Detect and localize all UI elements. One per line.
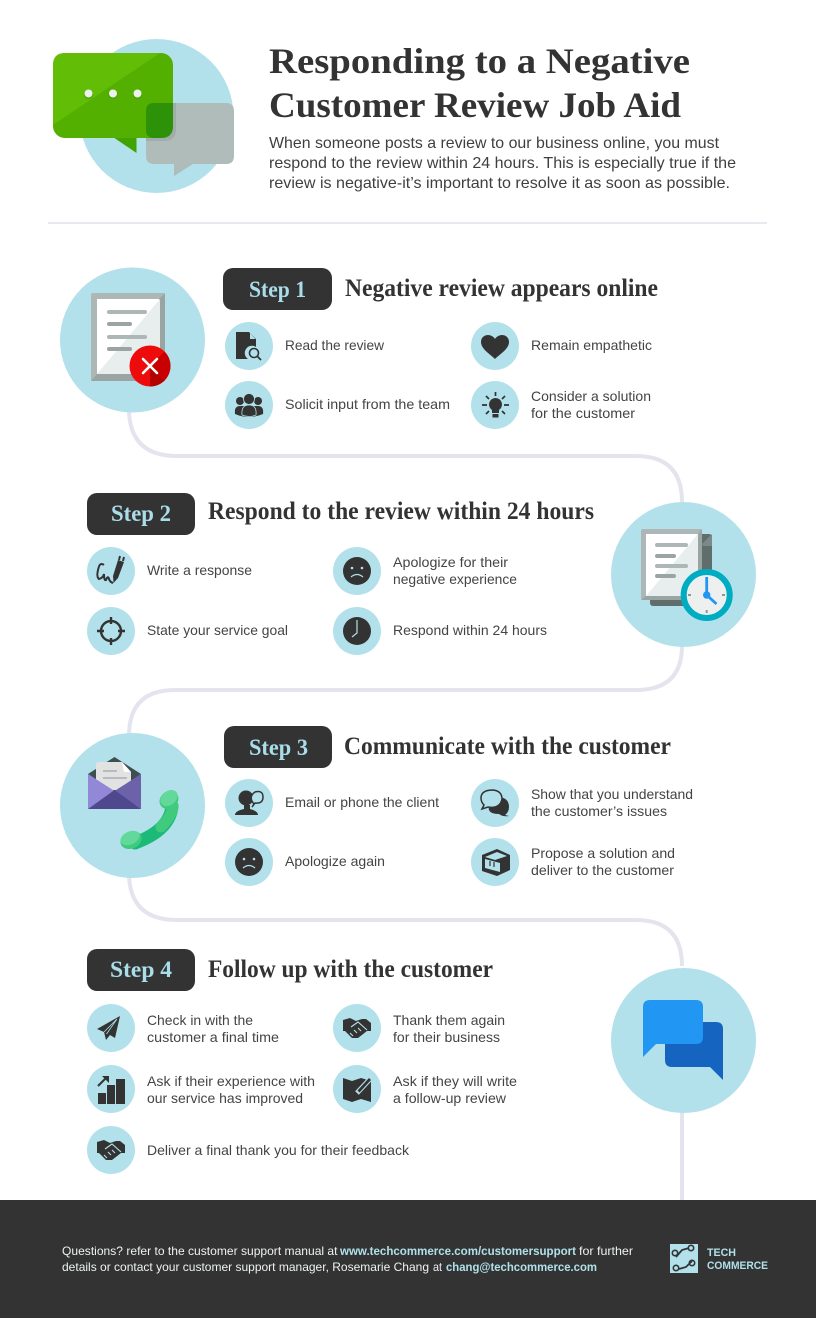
item: consider a solution: Consider a solution	[531, 388, 651, 404]
item: apologize: Apologize for their	[393, 554, 508, 570]
footer text: at	[433, 1260, 443, 1274]
item: check in: customer a final time	[147, 1029, 279, 1045]
step 4 badge: Step 4	[110, 957, 173, 982]
item: propose a solution: Propose a solution and	[531, 845, 675, 861]
step 1 badge	[223, 268, 332, 310]
item: check in	[87, 1004, 279, 1052]
intro paragraph	[269, 135, 736, 192]
item: email or phone	[225, 779, 439, 827]
intro paragraph: review is negative-it’s important to resolve it as soon as possible.	[269, 175, 730, 192]
item: consider a solution: for the customer	[531, 405, 635, 421]
item: show understanding	[471, 779, 693, 827]
icon: header chat bubbles	[53, 39, 234, 193]
footer text	[62, 1244, 633, 1274]
panel: footer	[0, 1200, 816, 1318]
item: remain empathetic	[471, 322, 652, 370]
item: write a response: Write a response	[147, 562, 252, 578]
footer text: www.techcommerce.com/customersupport	[339, 1244, 576, 1258]
panel: step 3	[60, 726, 693, 886]
item: show understanding: Show that you understand	[531, 786, 693, 802]
item: ask about experience	[87, 1065, 315, 1113]
title: Responding to a Negative	[269, 41, 690, 81]
panel: step 2	[87, 493, 756, 655]
footer text: for further	[579, 1244, 633, 1258]
item: remain empathetic: Remain empathetic	[531, 337, 652, 353]
item: follow-up review	[333, 1065, 517, 1113]
step 1 heading: Negative review appears online	[345, 275, 658, 302]
item: show understanding: the customer’s issues	[531, 803, 667, 819]
item: state your service goal: State your service goal	[147, 622, 288, 638]
step 4 heading: Follow up with the customer	[208, 956, 493, 983]
panel: step 4	[87, 949, 756, 1174]
footer text: chang@techcommerce.com	[446, 1260, 597, 1274]
intro paragraph: respond to the review within 24 hours. This is especially true if the	[269, 155, 736, 172]
item: consider a solution	[471, 381, 651, 429]
item: final thank you	[87, 1126, 410, 1174]
logo: tech commerce: COMMERCE	[707, 1260, 768, 1272]
panel: step 1	[60, 268, 658, 429]
item: thank them again: Thank them again	[393, 1012, 505, 1028]
item: solicit input: Solicit input from the team	[285, 396, 450, 412]
item: thank them again	[333, 1004, 505, 1052]
item: state your service goal	[87, 607, 288, 655]
item: final thank you: Deliver a final thank you for their feedback	[147, 1142, 410, 1158]
step 2 badge	[87, 493, 195, 535]
icon: document with clock	[611, 502, 756, 647]
title	[269, 41, 690, 125]
title: Customer Review Job Aid	[269, 85, 681, 125]
intro paragraph: When someone posts a review to our business online, you must	[269, 135, 720, 152]
step 2 badge: Step 2	[111, 501, 171, 526]
item: check in: Check in with the	[147, 1012, 253, 1028]
step 3 heading: Communicate with the customer	[344, 733, 671, 760]
item: ask about experience: Ask if their experience with	[147, 1073, 315, 1089]
step 3 badge	[224, 726, 332, 768]
item: email or phone: Email or phone the client	[285, 794, 439, 810]
step 3 badge: Step 3	[249, 735, 308, 760]
connector path between steps	[129, 405, 682, 1200]
logo: tech commerce: TECH	[707, 1247, 736, 1259]
item: apologize again: Apologize again	[285, 853, 385, 869]
footer text: Questions? refer to the customer support manual at	[62, 1244, 338, 1258]
item: respond within 24 hours: Respond within 24 hours	[393, 622, 547, 638]
item: propose a solution	[471, 838, 675, 886]
step 1 badge: Step 1	[249, 277, 306, 302]
item: read the review: Read the review	[285, 337, 385, 353]
icon: envelope and phone	[60, 733, 205, 878]
icon: blue chat bubbles	[611, 968, 756, 1113]
logo: tech commerce	[670, 1244, 768, 1273]
item: follow-up review: Ask if they will write	[393, 1073, 517, 1089]
item: respond within 24 hours	[333, 607, 547, 655]
item: follow-up review: a follow-up review	[393, 1090, 507, 1106]
item: solicit input	[225, 381, 450, 429]
item: apologize	[333, 547, 517, 595]
item: apologize again	[225, 838, 385, 886]
item: thank them again: for their business	[393, 1029, 500, 1045]
item: write a response	[87, 547, 252, 595]
footer text: details or contact your customer support manager, Rosemarie Chang	[62, 1260, 429, 1274]
item: apologize: negative experience	[393, 571, 517, 587]
item: propose a solution: deliver to the customer	[531, 862, 674, 878]
item: ask about experience: our service has improved	[147, 1090, 303, 1106]
item: read the review	[225, 322, 385, 370]
step 2 heading: Respond to the review within 24 hours	[208, 498, 594, 525]
step 4 badge	[87, 949, 195, 991]
icon: document with red x	[60, 268, 205, 412]
